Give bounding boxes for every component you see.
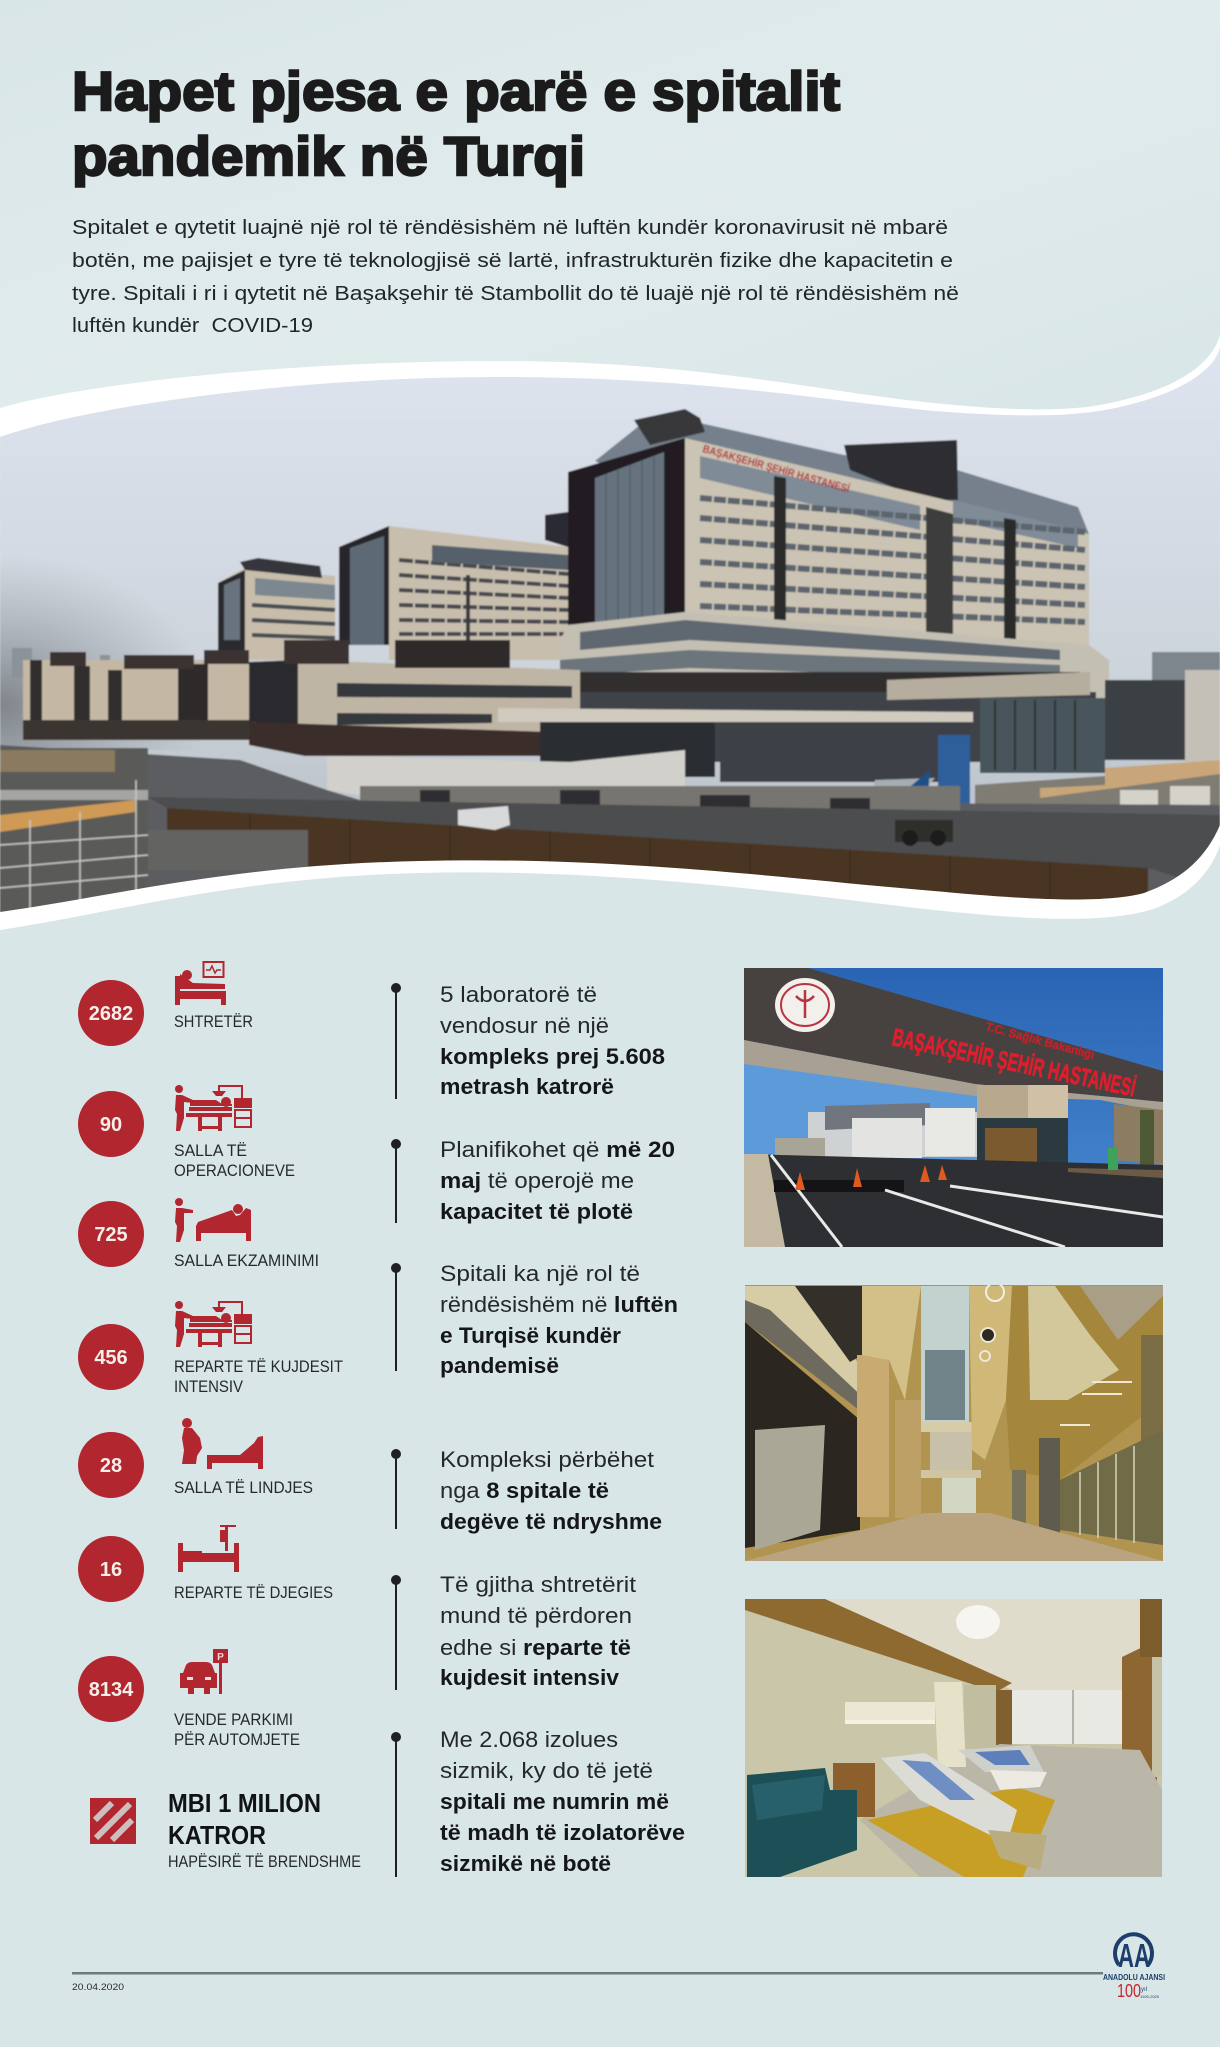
- gate pillars: [977, 1085, 1028, 1118]
- stat: 8134 parking places: [78, 1649, 300, 1749]
- lower terrace right: [975, 760, 1220, 825]
- icon: bed with monitor: [175, 962, 226, 1005]
- icon: car and parking sign: [180, 1649, 228, 1694]
- panel: header background: [0, 0, 1220, 409]
- main tower red sign: BAŞAKŞEHİR ŞEHİR HASTANESİ: [701, 442, 851, 496]
- icon: striped square: [90, 1798, 136, 1844]
- photo: atrium interior: [745, 1283, 1163, 1561]
- skylight: [921, 1286, 969, 1422]
- fact: beds as intensive care: kujdesit intensiv: [440, 1665, 620, 1690]
- stat: 28 delivery rooms: SALLA TË LINDJES: [174, 1479, 313, 1497]
- stat: 90 operating rooms: 90: [100, 1114, 122, 1136]
- cabinet: [833, 1763, 875, 1817]
- fact: full capacity date: [391, 1137, 675, 1224]
- fact: eight hospitals: nga 8 spitale të: [440, 1478, 609, 1503]
- entrance terraces: [498, 670, 1220, 830]
- intro paragraph: Spitalet e qytetit luajnë një rol të rëndësishëm në luftën kundër koronavirusit në mbarë: [72, 217, 948, 239]
- right wall and wood panel: [1122, 1648, 1157, 1781]
- footer rule: [72, 1972, 1103, 1974]
- intro paragraph: botën, me pajisjet e tyre të teknologjisë së lartë, infrastrukturën fizike dhe kapacitetin e: [72, 250, 953, 272]
- stat: 90 operating rooms: OPERACIONEVE: [174, 1162, 295, 1180]
- stat: 725 examination rooms: SALLA EKZAMINIMI: [174, 1252, 319, 1270]
- stat: 2682 beds: [78, 962, 253, 1046]
- intro paragraph: [72, 217, 959, 337]
- fact: role in pandemic: pandemisë: [440, 1353, 559, 1378]
- title: [72, 60, 840, 187]
- intro paragraph: luftën kundër COVID-19: [72, 315, 313, 337]
- fact: laboratories: vendosur në një: [440, 1013, 609, 1038]
- fact: role in pandemic: Spitali ka një rol të: [440, 1261, 640, 1286]
- icon: pregnant woman and bed: [182, 1418, 263, 1469]
- stat: 725 examination rooms: [78, 1198, 319, 1270]
- fact: beds as intensive care: [391, 1572, 636, 1690]
- fact: eight hospitals: Kompleksi përbëhet: [440, 1447, 654, 1472]
- ministry seal: [775, 978, 835, 1032]
- fact: eight hospitals: [391, 1447, 662, 1534]
- stat: 28 delivery rooms: 28: [100, 1455, 122, 1477]
- fact: seismic isolators: sizmik, ky do të jetë: [440, 1758, 653, 1783]
- fact: full capacity date: kapacitet të plotë: [440, 1199, 633, 1224]
- stat: 8134 parking places: PËR AUTOMJETE: [174, 1731, 300, 1749]
- fact: role in pandemic: e Turqisë kundër: [440, 1323, 621, 1348]
- fact: role in pandemic: rëndësishëm në luftën: [440, 1292, 678, 1317]
- fact: beds as intensive care: mund të përdoren: [440, 1603, 632, 1628]
- podium: [560, 612, 1109, 762]
- wave band: top: [0, 0, 1220, 437]
- fact: seismic isolators: Me 2.068 izolues: [440, 1727, 618, 1752]
- van and digger: [458, 806, 953, 846]
- gate road: [744, 1154, 1163, 1247]
- room lamp: [956, 1605, 1000, 1639]
- intro paragraph: tyre. Spitali i ri i qytetit në Başakşehir të Stambollit do të luajë një rol të rëndësishëm në: [72, 283, 959, 305]
- gate canopy: [744, 968, 1163, 1102]
- fact: laboratories: metrash katrorë: [440, 1074, 614, 1099]
- stat: 90 operating rooms: [78, 1085, 295, 1180]
- logo: Anadolu Agency: 100: [1117, 1981, 1141, 2001]
- third tower: [218, 558, 335, 660]
- left balcony: [745, 1286, 857, 1392]
- fact: seismic isolators: [391, 1727, 685, 1877]
- floor: [745, 1513, 1163, 1561]
- main tower: [568, 409, 1089, 646]
- logo: Anadolu Agency: 1920-2020: [1140, 1994, 1160, 1999]
- low left blocks: [23, 650, 249, 740]
- title: Hapet pjesa e parë e spitalit: [72, 60, 840, 122]
- stat: 725 examination rooms: 725: [94, 1224, 128, 1246]
- stat: 456 intensive care: 456: [94, 1347, 128, 1369]
- gate buildings: [775, 1103, 978, 1158]
- scaffolding: [0, 748, 308, 938]
- gate sign: T.C. Sağlık Bakanlığı: [984, 1019, 1096, 1062]
- icon: examination: [175, 1198, 251, 1242]
- icon: burn unit bed with drip: [178, 1525, 239, 1572]
- fact: seismic isolators: spitali me numrin më: [440, 1789, 669, 1814]
- icon: car and parking sign: P: [217, 1652, 224, 1663]
- fact: eight hospitals: degëve të ndryshme: [440, 1509, 662, 1534]
- fact: seismic isolators: të madh të izolatorëve: [440, 1820, 685, 1845]
- stat: over 1 million square metres: MBI 1 MILION: [168, 1788, 321, 1818]
- stat: 90 operating rooms: SALLA TË: [174, 1142, 247, 1160]
- stat: 456 intensive care: REPARTE TË KUJDESIT: [174, 1358, 343, 1376]
- stat: 2682 beds: 2682: [89, 1003, 133, 1025]
- second tower: [339, 512, 568, 660]
- stat: 16 burn units: REPARTE TË DJEGIES: [174, 1584, 333, 1602]
- fact: full capacity date: Planifikohet që më 20: [440, 1137, 675, 1162]
- stat: 16 burn units: 16: [100, 1559, 122, 1581]
- fact: full capacity date: maj të operojë me: [440, 1168, 634, 1193]
- headwall and curtain: [845, 1702, 935, 1720]
- stat: 2682 beds: SHTRETËR: [174, 1013, 253, 1031]
- fact: beds as intensive care: edhe si reparte të: [440, 1635, 631, 1660]
- stat: 16 burn units: [78, 1525, 333, 1602]
- fact: role in pandemic: [391, 1261, 678, 1378]
- stat: 456 intensive care: [78, 1301, 343, 1396]
- title: pandemik në Turqi: [72, 125, 585, 187]
- stat: over 1 million square metres: HAPËSIRË TË BRENDSHME: [168, 1853, 361, 1871]
- cream columns: [857, 1355, 889, 1517]
- right ceiling: [1006, 1286, 1163, 1480]
- date: 20.04.2020: [72, 1982, 124, 1993]
- panel: body background: [0, 845, 1220, 2047]
- gate sign: [890, 1019, 1138, 1102]
- wave band: bottom: [0, 825, 1220, 2047]
- stat: 8134 parking places: 8134: [89, 1679, 134, 1701]
- beds: [881, 1745, 1047, 1870]
- stat: 8134 parking places: VENDE PARKIMI: [174, 1711, 293, 1729]
- photo: patient room: [745, 1599, 1162, 1877]
- logo: Anadolu Agency: yıl: [1141, 1987, 1147, 1993]
- photo: hospital gate: [744, 968, 1163, 1247]
- low central block: [249, 640, 580, 756]
- hero photo: hospital complex: [0, 330, 1220, 940]
- logo: Anadolu Agency: [1103, 1934, 1165, 2001]
- stat: over 1 million square metres: [90, 1788, 361, 1871]
- fact: laboratories: 5 laboratorë të: [440, 982, 597, 1007]
- ground and road: [0, 745, 1220, 940]
- stat: over 1 million square metres: KATROR: [168, 1820, 266, 1850]
- white ramp: [327, 750, 685, 795]
- stat: 28 delivery rooms: [78, 1418, 313, 1498]
- logo: Anadolu Agency: AA: [1118, 1937, 1150, 1974]
- logo: Anadolu Agency: ANADOLU AJANSI: [1103, 1972, 1165, 1982]
- floor: [860, 1744, 1162, 1877]
- fact: laboratories: kompleks prej 5.608: [440, 1044, 665, 1069]
- stat: 456 intensive care: INTENSIV: [174, 1378, 243, 1396]
- armchair: [747, 1768, 857, 1877]
- icon: intensive care: [175, 1301, 252, 1347]
- fact: seismic isolators: sizmikë në botë: [440, 1851, 611, 1876]
- fact: beds as intensive care: Të gjitha shtretërit: [440, 1572, 636, 1597]
- fact: laboratories: [391, 982, 665, 1099]
- ceiling strip: [969, 1286, 1012, 1460]
- icon: surgery: [175, 1085, 252, 1131]
- distant skyline: [12, 648, 1220, 692]
- right shops: [1060, 1430, 1163, 1545]
